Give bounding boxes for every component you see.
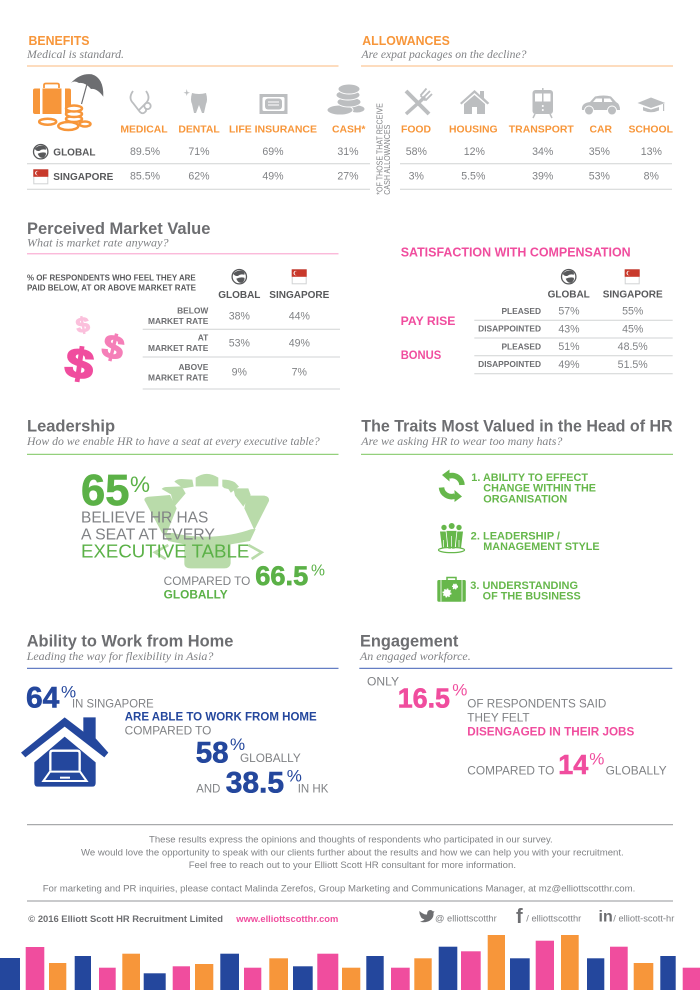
stat: 14% globally: GLOBALLY xyxy=(606,763,667,777)
row: singapore: 27% xyxy=(337,171,359,183)
row: pay rise disappointed xyxy=(478,323,644,335)
footer statement: Feel free to reach out to your Elliott Scott HR consultant for more information. xyxy=(189,860,516,871)
text: believe HR has a seat: A SEAT AT EVERY xyxy=(81,525,215,543)
label: bonus: BONUS xyxy=(401,348,441,362)
row: global xyxy=(406,146,662,158)
panel: satisfaction with compensation xyxy=(401,246,673,374)
text: of respondents xyxy=(467,697,634,739)
heading: SATISFACTION WITH COMPENSATION xyxy=(401,246,631,260)
row: at market rate: 53% xyxy=(229,337,250,349)
subheading: Leading the way for flexibility in Asia? xyxy=(26,649,213,663)
row: pay rise pleased xyxy=(501,306,644,318)
subheading: An engaged workforce. xyxy=(359,649,471,663)
row: singapore: 62% xyxy=(188,171,210,183)
row: global: 31% xyxy=(337,146,359,158)
icon: stethoscope xyxy=(130,91,151,113)
heading: Engagement xyxy=(360,633,459,651)
row: pay rise disappointed: DISAPPOINTED xyxy=(478,324,541,334)
social links: / elliott-scott-hr xyxy=(613,914,674,924)
icon: dollar signs: $ xyxy=(62,338,97,389)
table header labels: DENTAL xyxy=(178,124,220,136)
panel: perceived market value xyxy=(27,220,340,389)
icon: house xyxy=(460,90,489,114)
row: below market rate xyxy=(148,305,310,326)
row: above market rate xyxy=(148,362,308,383)
rotated footnote: *OF THOSE THAT RECEIVE xyxy=(375,103,384,195)
column headers xyxy=(548,269,663,301)
description: PAID BELOW, AT OR ABOVE MARKET RATE xyxy=(27,282,196,292)
description: % OF RESPONDENTS WHO FEEL THEY ARE xyxy=(27,273,196,283)
stat: 58% globally xyxy=(196,735,301,769)
stat: 64% in Singapore: % xyxy=(61,683,76,702)
row: above market rate: MARKET RATE xyxy=(148,373,209,383)
table header labels xyxy=(401,124,674,136)
row: bonus disappointed: DISAPPOINTED xyxy=(478,359,541,369)
row: below market rate: BELOW xyxy=(177,305,208,315)
row: at market rate xyxy=(148,333,310,353)
trait 1 xyxy=(471,472,596,506)
stat: 64% in Singapore: IN SINGAPORE xyxy=(72,696,154,710)
social links xyxy=(419,906,674,928)
stat: 38.5% in HK: % xyxy=(287,767,302,786)
row: pay rise pleased: 57% xyxy=(558,306,580,318)
row: pay rise pleased: PLEASED xyxy=(501,306,541,316)
copyright and website: © 2016 Elliott Scott HR Recruitment Limited xyxy=(28,914,223,924)
text: compared to globally: % xyxy=(311,563,325,580)
subheading: allowances: Are expat packages on the decline? xyxy=(361,47,526,61)
text: of respondents: OF RESPONDENTS SAID xyxy=(467,697,606,711)
column headers: GLOBAL xyxy=(548,290,590,301)
row: at market rate: 49% xyxy=(289,337,310,349)
icon: coins xyxy=(327,84,365,115)
social links: @ elliottscotthr xyxy=(435,914,497,924)
row: singapore: 85.5% xyxy=(130,171,161,183)
row: above market rate: 7% xyxy=(292,367,308,379)
panel: benefits xyxy=(26,33,370,189)
row: bonus disappointed: 49% xyxy=(558,359,580,371)
stat: 14% globally: COMPARED TO xyxy=(467,763,554,777)
row: global xyxy=(34,144,359,159)
icon: train xyxy=(532,88,553,118)
row: above market rate: ABOVE xyxy=(179,362,209,372)
trait 3 xyxy=(470,580,581,602)
trait 2 xyxy=(471,530,600,553)
row: singapore: 39% xyxy=(532,171,554,183)
icon: dollar signs: $ xyxy=(74,312,92,338)
panel: engagement xyxy=(359,633,672,780)
panel: traits most valued xyxy=(360,418,673,602)
text: only: ONLY xyxy=(367,675,399,689)
stat: 38.5% in HK: 38.5 xyxy=(226,767,284,800)
text: able to work from home: COMPARED TO xyxy=(125,723,211,737)
stat: 14% globally: 14 xyxy=(558,749,589,780)
icon: change arrows xyxy=(442,470,462,502)
table header labels: FOOD xyxy=(401,124,432,136)
heading: Leadership xyxy=(27,418,115,436)
stat: 14% globally xyxy=(467,749,667,780)
text: of respondents: DISENGAGED IN THEIR JOBS xyxy=(467,725,634,739)
row: below market rate: 38% xyxy=(229,310,250,322)
icon: boardroom table xyxy=(144,474,269,568)
decorative bar chart strip xyxy=(0,935,700,990)
footer statement xyxy=(27,824,673,902)
icon: linkedin: in xyxy=(598,909,613,926)
copyright and website xyxy=(28,914,338,924)
row: singapore xyxy=(33,169,359,184)
label: pay rise: PAY RISE xyxy=(401,314,455,328)
stat: 65%: % xyxy=(130,472,150,497)
row: singapore: SINGAPORE xyxy=(53,172,114,183)
icon: suitcase, umbrella and coins xyxy=(33,74,103,130)
stat: 64% in Singapore: 64 xyxy=(26,682,60,715)
row: global: 12% xyxy=(464,146,485,158)
description xyxy=(27,273,196,292)
column headers: SINGAPORE xyxy=(603,290,663,301)
icon: car xyxy=(582,96,620,115)
text: compared to globally xyxy=(164,560,325,601)
trait 1: 1. ABILITY TO EFFECT xyxy=(471,472,588,484)
icon: house with laptop xyxy=(21,717,108,787)
icon: graduation cap xyxy=(638,98,665,112)
subheading: How do we enable HR to have a seat at every executive table? xyxy=(26,434,320,448)
stat: 16.5%: 16.5 xyxy=(398,683,450,714)
stat: 16.5%: % xyxy=(452,681,467,700)
row: global: 69% xyxy=(262,146,284,158)
stat: 58% globally: % xyxy=(230,735,245,754)
subheading: Are we asking HR to wear too many hats? xyxy=(360,434,562,448)
icon: dollar signs: $ xyxy=(98,327,128,368)
table header labels xyxy=(120,124,366,136)
row: global: 89.5% xyxy=(130,146,161,158)
stat: 38.5% in HK xyxy=(196,767,329,800)
trait 2: 2. LEADERSHIP / xyxy=(471,530,560,542)
row: below market rate: MARKET RATE xyxy=(148,316,209,326)
icon: tooth xyxy=(184,89,207,113)
row: global: 71% xyxy=(188,146,210,158)
stat: 58% globally: 58 xyxy=(196,736,229,769)
icon: twitter xyxy=(419,910,434,922)
row: singapore: 49% xyxy=(262,171,284,183)
text: able to work from home: ARE ABLE TO WORK FROM HOME xyxy=(125,709,317,723)
footer statement: For marketing and PR inquiries, please contact Malinda Zerefos, Group Marketing and Communications Manager, at mz@elliottscotthr.com. xyxy=(43,884,635,895)
trait 3: OF THE BUSINESS xyxy=(483,590,581,602)
row: singapore: 53% xyxy=(589,171,610,183)
row: at market rate: MARKET RATE xyxy=(148,343,209,353)
heading: Perceived Market Value xyxy=(27,220,210,238)
row: bonus disappointed: 51.5% xyxy=(618,359,648,371)
row: global: GLOBAL xyxy=(53,148,96,158)
stat: 64% in Singapore xyxy=(26,682,154,715)
row: pay rise disappointed: 45% xyxy=(622,323,644,335)
rotated footnote: CASH ALLOWANCES xyxy=(383,124,392,195)
copyright and website: www.elliottscotthr.com xyxy=(235,914,338,924)
heading: allowances: ALLOWANCES xyxy=(362,33,450,48)
rotated footnote xyxy=(375,103,392,195)
column headers: GLOBAL xyxy=(218,290,260,301)
text: compared to globally: 66.5 xyxy=(255,560,308,591)
stat: 14% globally: % xyxy=(589,749,604,768)
row: singapore: 5.5% xyxy=(461,171,486,183)
subheading: benefits: Medical is standard. xyxy=(26,47,124,61)
text: compared to globally: COMPARED TO xyxy=(164,574,250,588)
table header labels: MEDICAL xyxy=(120,124,168,136)
heading: benefits: BENEFITS xyxy=(28,33,90,48)
icon: dollar signs xyxy=(62,312,128,389)
stat: 58% globally: GLOBALLY xyxy=(240,751,301,765)
row: global: 58% xyxy=(406,146,427,158)
icon: certificate xyxy=(260,94,288,114)
panel: leadership xyxy=(26,418,338,601)
row: singapore: 8% xyxy=(644,171,660,183)
trait 3: 3. UNDERSTANDING xyxy=(470,580,578,592)
panel: ability to work from home xyxy=(21,633,339,800)
stat: 65%: 65 xyxy=(81,467,129,515)
row: bonus pleased: PLEASED xyxy=(501,341,541,351)
table header labels: CAR xyxy=(589,124,612,136)
trait 2: MANAGEMENT STYLE xyxy=(483,541,600,553)
table header labels: CASH* xyxy=(332,124,366,136)
stat: 38.5% in HK: AND xyxy=(196,782,220,796)
subheading: What is market rate anyway? xyxy=(27,236,168,250)
row: above market rate: 9% xyxy=(232,367,248,379)
panel: allowances xyxy=(361,33,674,189)
row: global: 34% xyxy=(532,146,554,158)
heading: Ability to Work from Home xyxy=(27,633,233,651)
icon: knife and fork xyxy=(406,88,432,114)
row: singapore xyxy=(409,171,660,183)
row: at market rate: AT xyxy=(198,333,209,343)
icon: facebook: f xyxy=(516,906,523,928)
table header labels: TRANSPORT xyxy=(509,124,574,136)
column headers xyxy=(218,269,330,301)
row: global: 35% xyxy=(589,146,610,158)
icon: briefcase with gears xyxy=(437,578,466,602)
row: pay rise disappointed: 43% xyxy=(558,323,580,335)
text: believe HR has a seat xyxy=(81,509,249,562)
heading: The Traits Most Valued in the Head of HR xyxy=(361,418,673,436)
stat: 38.5% in HK: IN HK xyxy=(298,782,329,796)
social links: / elliottscotthr xyxy=(526,914,581,924)
table header labels: LIFE INSURANCE xyxy=(229,124,317,136)
text: of respondents: THEY FELT xyxy=(467,711,530,725)
row: pay rise pleased: 55% xyxy=(622,306,644,318)
trait 1: ORGANISATION xyxy=(483,494,567,506)
text: able to work from home xyxy=(125,709,317,737)
footer statement: These results express the opinions and thoughts of respondents who participated in our survey. xyxy=(149,834,553,845)
column headers: SINGAPORE xyxy=(269,290,330,301)
icon: leadership group xyxy=(438,523,464,553)
row: singapore: 3% xyxy=(409,171,425,183)
text: compared to globally: GLOBALLY xyxy=(164,589,228,601)
row: bonus pleased: 51% xyxy=(558,341,580,353)
row: below market rate: 44% xyxy=(289,310,310,322)
row: bonus pleased: 48.5% xyxy=(618,341,648,353)
text: believe HR has a seat: EXECUTIVE TABLE xyxy=(81,542,249,562)
footer statement: We would love the opportunity to speak with our clients further about the results and how we can help you with your recruitment. xyxy=(81,847,624,858)
row: global: 13% xyxy=(641,146,662,158)
table header labels: SCHOOL xyxy=(628,124,674,136)
text: believe HR has a seat: BELIEVE HR HAS xyxy=(81,509,208,527)
table header labels: HOUSING xyxy=(449,124,498,136)
row: bonus pleased xyxy=(501,341,648,353)
trait 1: CHANGE WITHIN THE xyxy=(483,483,596,495)
row: bonus disappointed xyxy=(478,359,648,371)
